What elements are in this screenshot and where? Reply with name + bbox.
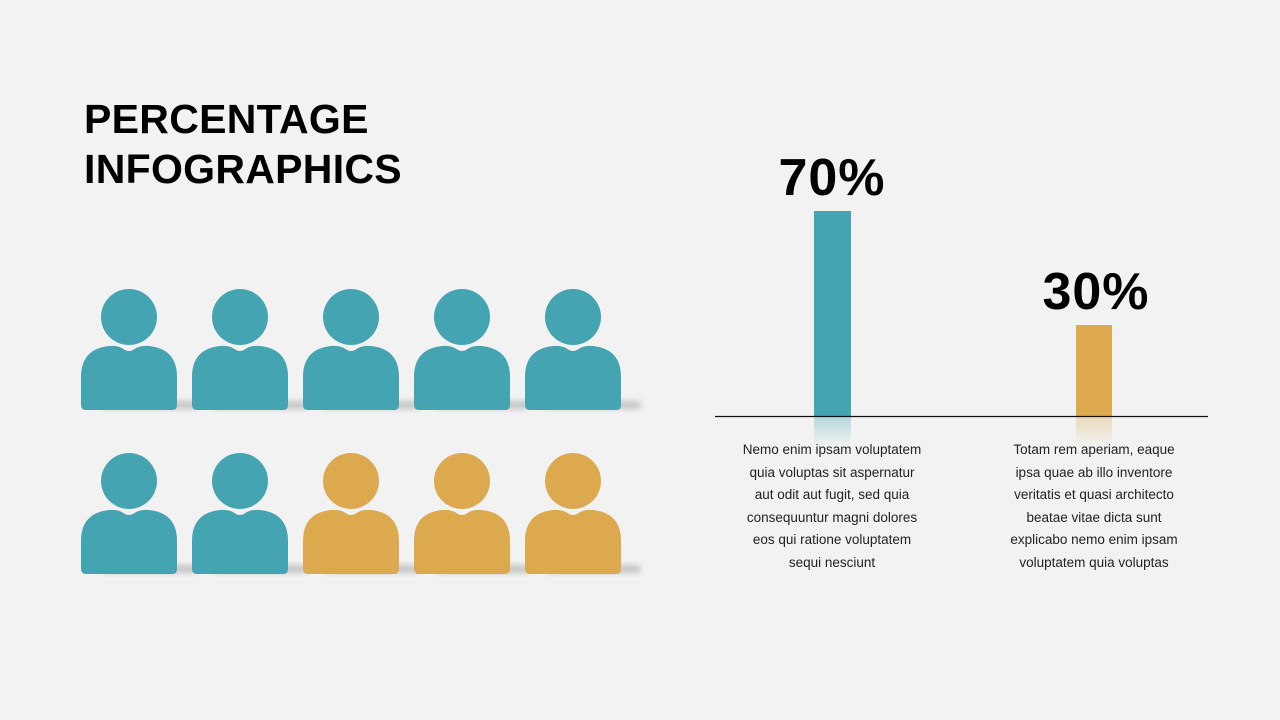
text block left: aut odit aut fugit, sed quia bbox=[755, 487, 909, 502]
text block right bbox=[1010, 442, 1178, 570]
title: PERCENTAGE bbox=[84, 96, 369, 142]
bar 70% bbox=[814, 211, 851, 446]
text block left: Nemo enim ipsam voluptatem bbox=[743, 442, 921, 457]
bar chart bbox=[715, 211, 1208, 442]
title bbox=[84, 96, 402, 192]
people icon grid bbox=[81, 289, 642, 576]
text block right: voluptatem quia voluptas bbox=[1019, 555, 1169, 570]
row 1 icons bbox=[81, 288, 641, 410]
text block left: consequuntur magni dolores bbox=[747, 510, 917, 525]
text block left: sequi nesciunt bbox=[789, 555, 875, 570]
text block left: quia voluptas sit aspernatur bbox=[749, 465, 915, 480]
text block left: eos qui ratione voluptatem bbox=[753, 532, 911, 547]
row 2 icons bbox=[81, 452, 641, 574]
bar 30% bbox=[1076, 325, 1112, 446]
label 30%: 30% bbox=[1042, 263, 1150, 321]
text block right: beatae vitae dicta sunt bbox=[1026, 510, 1162, 525]
text block right: veritatis et quasi architecto bbox=[1014, 487, 1174, 502]
text block left bbox=[743, 442, 921, 570]
title: INFOGRAPHICS bbox=[84, 146, 402, 192]
label 70%: 70% bbox=[778, 149, 886, 207]
text block right: ipsa quae ab illo inventore bbox=[1016, 465, 1172, 480]
text block right: explicabo nemo enim ipsam bbox=[1010, 532, 1178, 547]
text block right: Totam rem aperiam, eaque bbox=[1013, 442, 1175, 457]
